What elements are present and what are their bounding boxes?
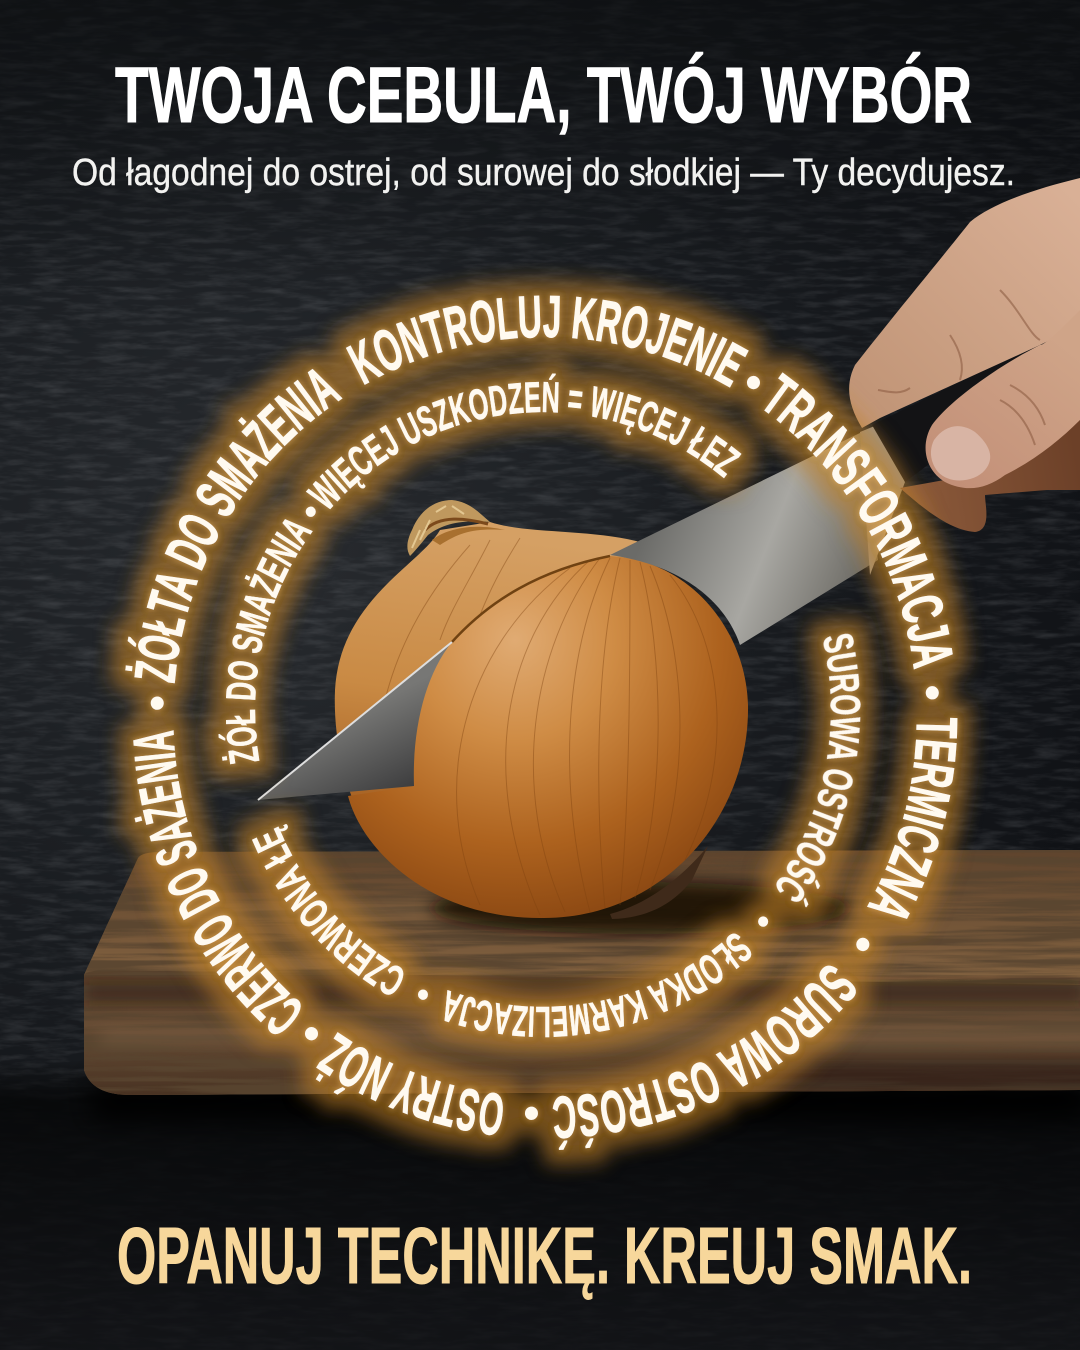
onion shadow on board bbox=[430, 882, 850, 934]
thumb bbox=[926, 310, 1080, 488]
outer: termiczna: TERMICZNA bbox=[842, 692, 984, 944]
index finger and palm bbox=[849, 178, 1080, 428]
outer: kontroluj krojenie: KONTROLUJ KROJENIE bbox=[320, 269, 774, 413]
knife bbox=[258, 423, 905, 800]
inner: słodka karmelizacja: SŁODKA KARMELIZACJA bbox=[422, 906, 775, 1062]
outer: ostry nóż: OSTRY NÓŻ bbox=[292, 1008, 526, 1162]
blade tip bbox=[258, 642, 452, 800]
dark floor below board bbox=[0, 1060, 1080, 1350]
outer: czerwo do sażenia: CZERWO DO SAŻENIA bbox=[108, 706, 324, 1059]
onion bbox=[335, 500, 748, 919]
outer: surowa ostrość: SUROWA OSTROŚĆ bbox=[530, 941, 880, 1177]
inner ring dots bbox=[304, 504, 770, 1001]
root bbox=[610, 846, 708, 919]
outer: żółta do smażenia: ŻÓŁTA DO SMAŻENIA bbox=[100, 342, 366, 706]
bolster bbox=[860, 423, 905, 575]
board cast shadow bbox=[90, 1080, 1080, 1120]
inner: czerwona: CZERWONA ŁĘ bbox=[210, 808, 442, 1007]
onion skin veins bbox=[385, 538, 717, 915]
outer text ring bbox=[32, 158, 1044, 1245]
skin creases bbox=[878, 290, 1045, 445]
stem bbox=[407, 500, 505, 556]
inner: żół do smażenia: ŻÓŁ DO SMAŻENIA bbox=[181, 502, 356, 768]
wooden cutting board bbox=[80, 840, 1080, 1105]
onion front half bbox=[348, 556, 748, 918]
outer: transformacja: TRANSFORMACJA bbox=[740, 346, 979, 693]
blade body bbox=[610, 432, 878, 645]
onion back half bbox=[335, 522, 650, 850]
hand holding knife bbox=[849, 178, 1080, 532]
knife handle bbox=[872, 343, 1052, 482]
middle finger bbox=[900, 420, 1080, 532]
cut line bbox=[452, 556, 610, 642]
inner text ring bbox=[181, 235, 920, 1157]
outer ring dots bbox=[151, 373, 939, 1120]
wood streaks bbox=[80, 840, 1080, 1105]
thumbnail bbox=[931, 426, 990, 480]
inner: surowa ostrość: SUROWA OSTROŚĆ bbox=[752, 608, 886, 932]
inner: więcej uszkodzeń więcej łez: WIĘCEJ USZKODZEŃ = WIĘCEJ ŁEZ bbox=[283, 350, 767, 534]
